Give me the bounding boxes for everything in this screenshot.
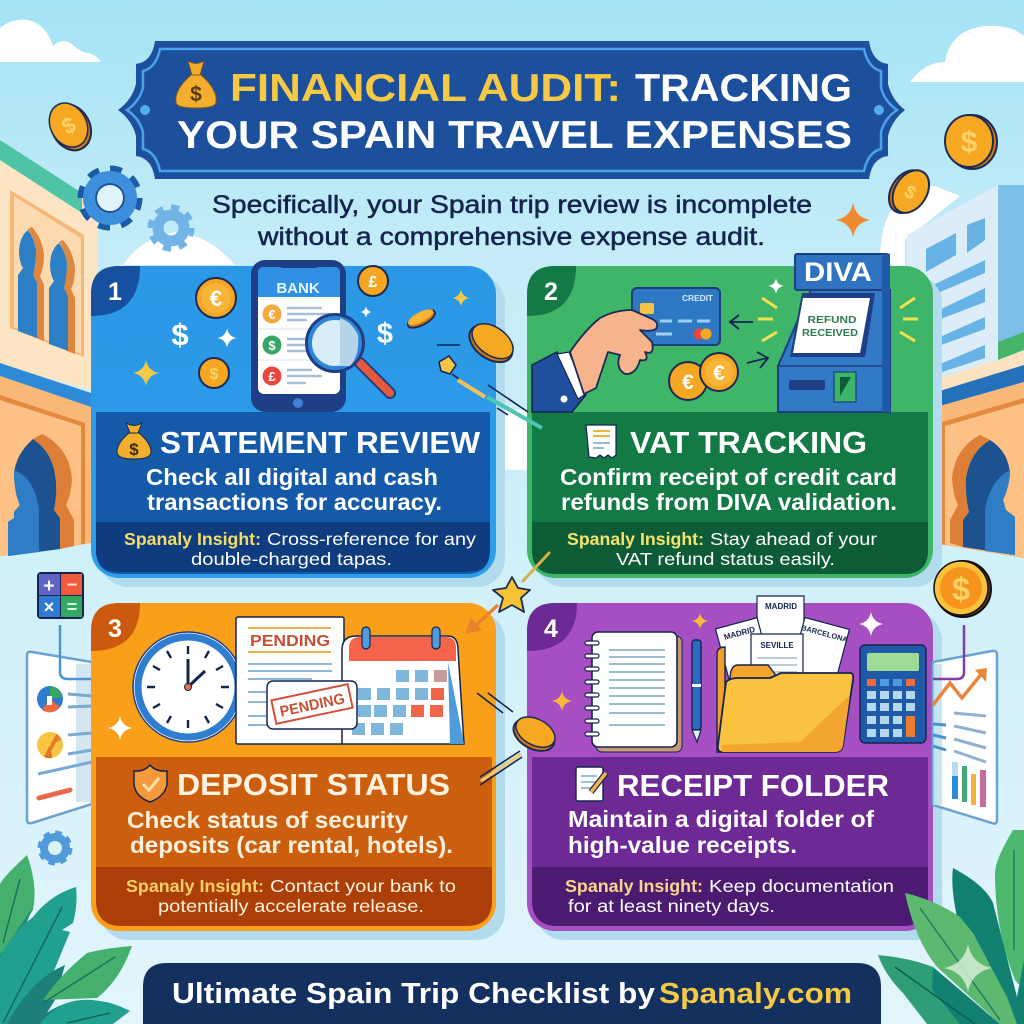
calculator mini icon bbox=[37, 572, 84, 619]
icon: note with pencil bbox=[576, 767, 606, 801]
text: description bbox=[560, 464, 897, 515]
text: heading: STATEMENT REVIEW bbox=[160, 425, 481, 460]
text: insight bbox=[124, 529, 476, 569]
coins and currency: $ bbox=[377, 318, 393, 350]
icon: pen bbox=[692, 640, 701, 742]
icon: money bag: $ bbox=[190, 83, 202, 106]
icon: phone with bank statement bbox=[251, 260, 346, 412]
text: insight: for at least ninety days. bbox=[568, 896, 775, 916]
leaves bottom right bbox=[878, 830, 1024, 1024]
coins and currency bbox=[133, 266, 470, 388]
calculator mini icon: − bbox=[66, 575, 78, 596]
icon: receipts: MADRID bbox=[723, 625, 756, 642]
icon: receipts bbox=[716, 596, 851, 696]
icon: receipts: MADRID bbox=[765, 602, 797, 611]
title text: TRACKING bbox=[635, 67, 852, 110]
left side report bbox=[27, 572, 92, 862]
coins and currency: £ bbox=[369, 274, 378, 291]
coins and currency: $ bbox=[171, 317, 189, 352]
text: description: Maintain a digital folder of bbox=[568, 806, 874, 832]
panel: VAT tracking bbox=[527, 254, 942, 587]
right building bbox=[907, 185, 1024, 558]
icon: receipts: SEVILLE bbox=[760, 641, 794, 650]
text: description bbox=[146, 464, 442, 515]
badge 4 bbox=[527, 603, 577, 651]
calculator mini icon: + bbox=[43, 576, 55, 597]
text: description: refunds from DIVA validation. bbox=[561, 489, 897, 515]
text: insight: potentially accelerate release. bbox=[158, 896, 424, 916]
text: insight: VAT refund status easily. bbox=[616, 549, 835, 569]
text: insight: Spanaly Insight: bbox=[124, 529, 261, 549]
coins and currency: € bbox=[210, 286, 222, 311]
icon: money bag small bbox=[117, 423, 151, 459]
icon: DIVA kiosk: REFUND bbox=[808, 314, 857, 326]
icon: DIVA kiosk bbox=[758, 254, 918, 412]
gear large bbox=[84, 172, 136, 224]
icon: phone with bank statement: £ bbox=[268, 369, 276, 384]
text: description: high-value receipts. bbox=[568, 832, 797, 858]
icon: pending stamp card: PENDING bbox=[278, 690, 346, 721]
footer bar: Spanaly.com bbox=[659, 978, 852, 1010]
icon: document pending: PENDING bbox=[250, 633, 330, 650]
panel: statement review bbox=[91, 260, 505, 587]
icon: euro coins: € bbox=[682, 371, 694, 394]
coin top-right bbox=[945, 115, 997, 169]
text: heading: DEPOSIT STATUS bbox=[177, 767, 450, 802]
gear small bbox=[152, 209, 190, 247]
coin top-right: $ bbox=[961, 126, 978, 159]
text: insight bbox=[565, 876, 894, 916]
sparkles bbox=[552, 612, 883, 711]
text: insight bbox=[126, 876, 456, 916]
icon: phone with bank statement: $ bbox=[268, 338, 276, 353]
clouds bbox=[0, 20, 1024, 470]
subtitle bbox=[212, 191, 812, 251]
icon: shield bbox=[134, 765, 167, 802]
calculator mini icon: = bbox=[67, 597, 77, 617]
badge 1: 1 bbox=[108, 278, 122, 306]
coin right middle bbox=[934, 561, 991, 617]
windows bbox=[926, 218, 985, 375]
leaves bottom left bbox=[0, 855, 132, 1024]
footer bar: Ultimate Spain Trip Checklist by bbox=[172, 978, 655, 1010]
badge 4: 4 bbox=[544, 615, 558, 643]
icon: phone with bank statement: € bbox=[268, 307, 276, 322]
text: insight: double-charged tapas. bbox=[191, 549, 392, 569]
star bbox=[493, 577, 530, 612]
text: description: Confirm receipt of credit card bbox=[560, 464, 897, 490]
title text: FINANCIAL AUDIT: bbox=[230, 67, 621, 110]
text: description: transactions for accuracy. bbox=[147, 489, 442, 515]
text: description: Check status of security bbox=[127, 807, 408, 833]
text: insight: Cross-reference for any bbox=[267, 529, 476, 549]
text: insight: Stay ahead of your bbox=[710, 529, 877, 549]
text: insight: Spanaly Insight: bbox=[567, 529, 704, 549]
icon: document pending bbox=[236, 617, 344, 744]
text: description: Check all digital and cash bbox=[146, 464, 438, 490]
icon: pending stamp card bbox=[267, 681, 357, 729]
coin top-left bbox=[42, 95, 99, 157]
text: insight bbox=[567, 529, 877, 569]
right side report bbox=[933, 561, 997, 824]
text: heading: VAT TRACKING bbox=[630, 425, 867, 460]
text: insight: Contact your bank to bbox=[270, 876, 456, 896]
flying coin small bbox=[405, 306, 438, 331]
coin right small bbox=[881, 162, 937, 221]
text: insight: Spanaly Insight: bbox=[126, 876, 264, 896]
icon: money bag small: $ bbox=[129, 440, 139, 459]
decoration coins and gears at top bbox=[42, 95, 997, 247]
left building bbox=[0, 140, 98, 556]
text: insight: Spanaly Insight: bbox=[565, 876, 703, 896]
subtitle: Specifically, your Spain trip review is incomplete bbox=[212, 191, 812, 219]
icon: folder bbox=[717, 647, 853, 752]
title banner bbox=[118, 41, 905, 179]
icon: magnifier bbox=[308, 316, 390, 393]
coin right middle: $ bbox=[952, 571, 970, 607]
coins and currency: $ bbox=[210, 366, 219, 383]
icon: calculator bbox=[860, 645, 926, 743]
coin top-left: $ bbox=[57, 112, 80, 139]
icon: euro coins: € bbox=[713, 362, 725, 385]
gear bottom-left bbox=[41, 834, 69, 862]
arrow from card 2 to star bbox=[522, 552, 550, 582]
calculator mini icon: × bbox=[44, 597, 54, 617]
text: heading: RECEIPT FOLDER bbox=[617, 768, 889, 803]
sparkle bbox=[108, 716, 132, 740]
icon: receipt bbox=[586, 425, 616, 458]
panel: receipt folder bbox=[527, 596, 942, 940]
left upper arched windows bbox=[18, 227, 75, 354]
subtitle: without a comprehensive expense audit. bbox=[257, 223, 765, 251]
text: description bbox=[568, 806, 874, 858]
title text bbox=[177, 67, 852, 157]
icon: DIVA kiosk: DIVA bbox=[804, 257, 872, 287]
icon: clock bbox=[133, 632, 243, 742]
title text: YOUR SPAIN TRAVEL EXPENSES bbox=[177, 114, 852, 157]
text: description: deposits (car rental, hotels). bbox=[130, 832, 453, 858]
icon: euro coins bbox=[669, 353, 738, 400]
right lower arch bbox=[950, 435, 1015, 555]
pie charts bbox=[37, 686, 63, 758]
icon: notebook bbox=[585, 632, 682, 752]
left lower arch bbox=[8, 434, 74, 556]
icon: calendar bbox=[342, 627, 464, 744]
arrow from star to card 3 bbox=[465, 605, 498, 634]
text: insight: Keep documentation bbox=[709, 876, 894, 896]
icon: phone with bank statement: BANK bbox=[276, 280, 320, 297]
flying coin centre bbox=[508, 710, 561, 757]
text: description bbox=[127, 807, 453, 858]
icon: hand and credit card bbox=[532, 288, 720, 412]
badge 1 bbox=[91, 266, 140, 316]
icon: receipts: BARCELONA bbox=[800, 623, 849, 644]
panel: deposit status bbox=[91, 603, 505, 940]
footer bar bbox=[143, 963, 881, 1024]
icon: money bag bbox=[176, 61, 216, 108]
badge 2: 2 bbox=[544, 278, 558, 306]
icon: hand and credit card: CREDIT bbox=[682, 294, 713, 303]
badge 3 bbox=[91, 603, 140, 651]
sparkle orange bbox=[836, 203, 870, 237]
flying coin large bbox=[463, 316, 520, 370]
coin right small: $ bbox=[901, 181, 920, 204]
badge 3: 3 bbox=[108, 615, 122, 643]
badge 2 bbox=[527, 266, 576, 316]
arrows bbox=[730, 315, 768, 368]
center connectors: flying coins, star and arrows bbox=[405, 306, 561, 785]
icon: DIVA kiosk: RECEIVED bbox=[802, 327, 858, 339]
